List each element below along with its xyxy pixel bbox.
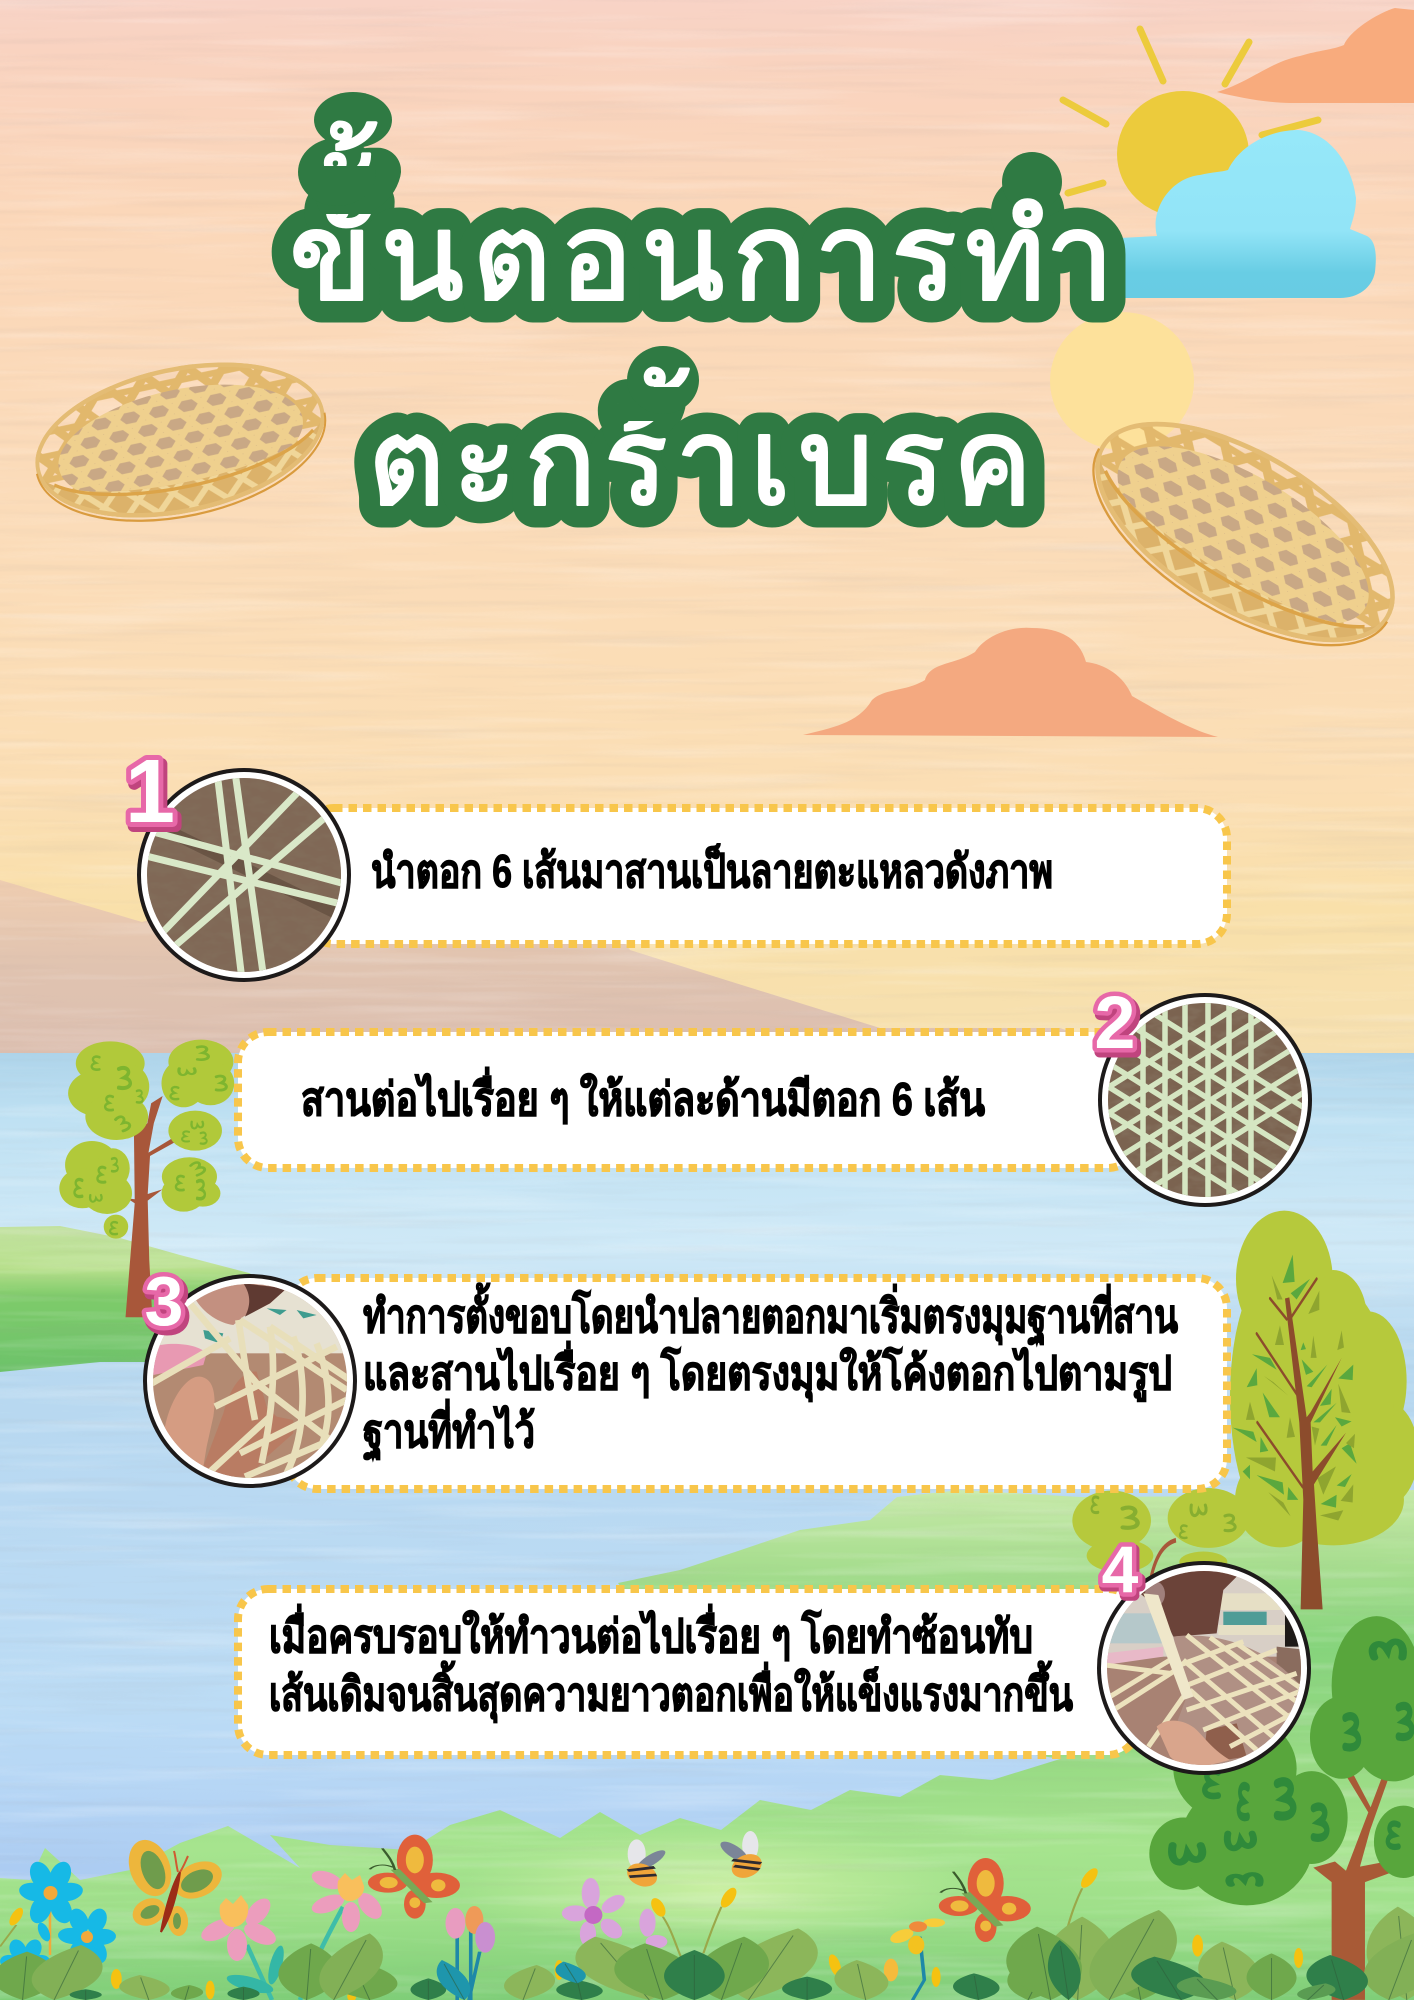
orange butterfly two [939,1858,1031,1942]
step 1 text: นำตอก 6 เส้นมาสานเป็นลายตะแหลวดังภาพ [371,843,1053,897]
badge: number 2: 2 [1094,981,1136,1064]
title line 1: ขั้นตอนการทำ [287,121,1120,277]
background: pale light patch on meadow [460,1826,980,1950]
badge: number 1: 1 [125,742,175,842]
title line 1: ขั้นตอนการทำ [289,169,1122,325]
badge: number 2: 2 [1097,985,1139,1068]
step 3 text: ฐานที่ทำไว้ [363,1399,535,1461]
pale yellow painted sun [1050,312,1194,450]
photo 3: setting the rim by hand [143,1273,360,1490]
cloud: top right orange [1217,8,1414,103]
yellow buds [7,1868,1303,2000]
background: river [0,1053,1414,1913]
badge: number 4: 4 [1102,1532,1139,1606]
basket right [1058,378,1414,690]
icon: blue cloud [1120,130,1376,298]
step 4 text [269,1604,1073,1723]
panel: step 3 [287,1278,1227,1489]
title line 2: ตะกร้าเบรค [393,360,1065,496]
blue flowers [0,1858,117,1990]
background: mountains [0,860,1135,1054]
badge: number 3: 3 [145,1262,183,1340]
tulips [445,1906,495,2000]
cloud: lower orange [803,628,1218,737]
step 2 text: สานต่อไปเรื่อย ๆ ให้แต่ละด้านมีตอก 6 เส้น [301,1067,985,1125]
panel: step 1 [304,808,1227,944]
title line 1 [287,92,1122,325]
yellow butterfly [121,1834,228,1937]
title [287,92,1122,530]
bees [623,1831,765,1887]
background: sky [0,0,1414,1060]
pink flowers with stems [198,1867,387,2000]
foliage leaves [0,1907,1414,2000]
badge: number 1: 1 [128,746,178,846]
step 3 text: ทำการตั้งขอบโดยนำปลายตอกมาเริ่มตรงมุมฐานที่สาน [363,1282,1178,1346]
title line 2: ตะกร้าเบรค [368,394,1040,530]
step 3 text: และสานไปเรื่อย ๆ โดยตรงมุมให้โค้งตอกไปตามรูป [363,1341,1172,1402]
step 4 text: เส้นเดิมจนสิ้นสุดความยาวตอกเพื่อให้แข็งแรงมากขึ้น [269,1660,1073,1723]
background: meadow [0,1490,1414,2000]
title line 2: ตะกร้าเบรค [368,394,1040,530]
tree: small tree behind step 4 [1072,1488,1249,1583]
tree: big green tree bottom right [1149,1616,1414,2000]
photo 4: finishing the basket [1097,1560,1313,1777]
photo 1: six strips [137,768,351,982]
panel: step 4 [238,1589,1138,1755]
tree: right triangular-leaf tree [1230,1211,1414,1609]
tree: left small tree [59,1040,234,1317]
yellow flower [884,1918,945,2000]
badge: number 3: 3 [148,1266,186,1344]
teal leaves [225,1944,359,1997]
background: left hill [0,1226,300,1372]
badge: number 4: 4 [1104,1535,1141,1609]
panel: step 2 [238,1032,1138,1168]
step 3 text [363,1282,1178,1461]
step 4 text: เมื่อครบรอบให้ทำวนต่อไปเรื่อย ๆ โดยทำซ้อนทับ [269,1604,1033,1662]
purple flowers [562,1878,667,1948]
bud stems [0,1888,1217,1980]
title line 1: ขั้นตอนการทำ [289,169,1122,325]
orange butterfly one [368,1835,460,1919]
photo 2: woven base [1098,993,1312,1207]
basket left [21,338,340,545]
bottom garden: flowers, butterflies, bees, leaves [0,1834,387,2000]
icon: sun with rays [1063,29,1318,217]
